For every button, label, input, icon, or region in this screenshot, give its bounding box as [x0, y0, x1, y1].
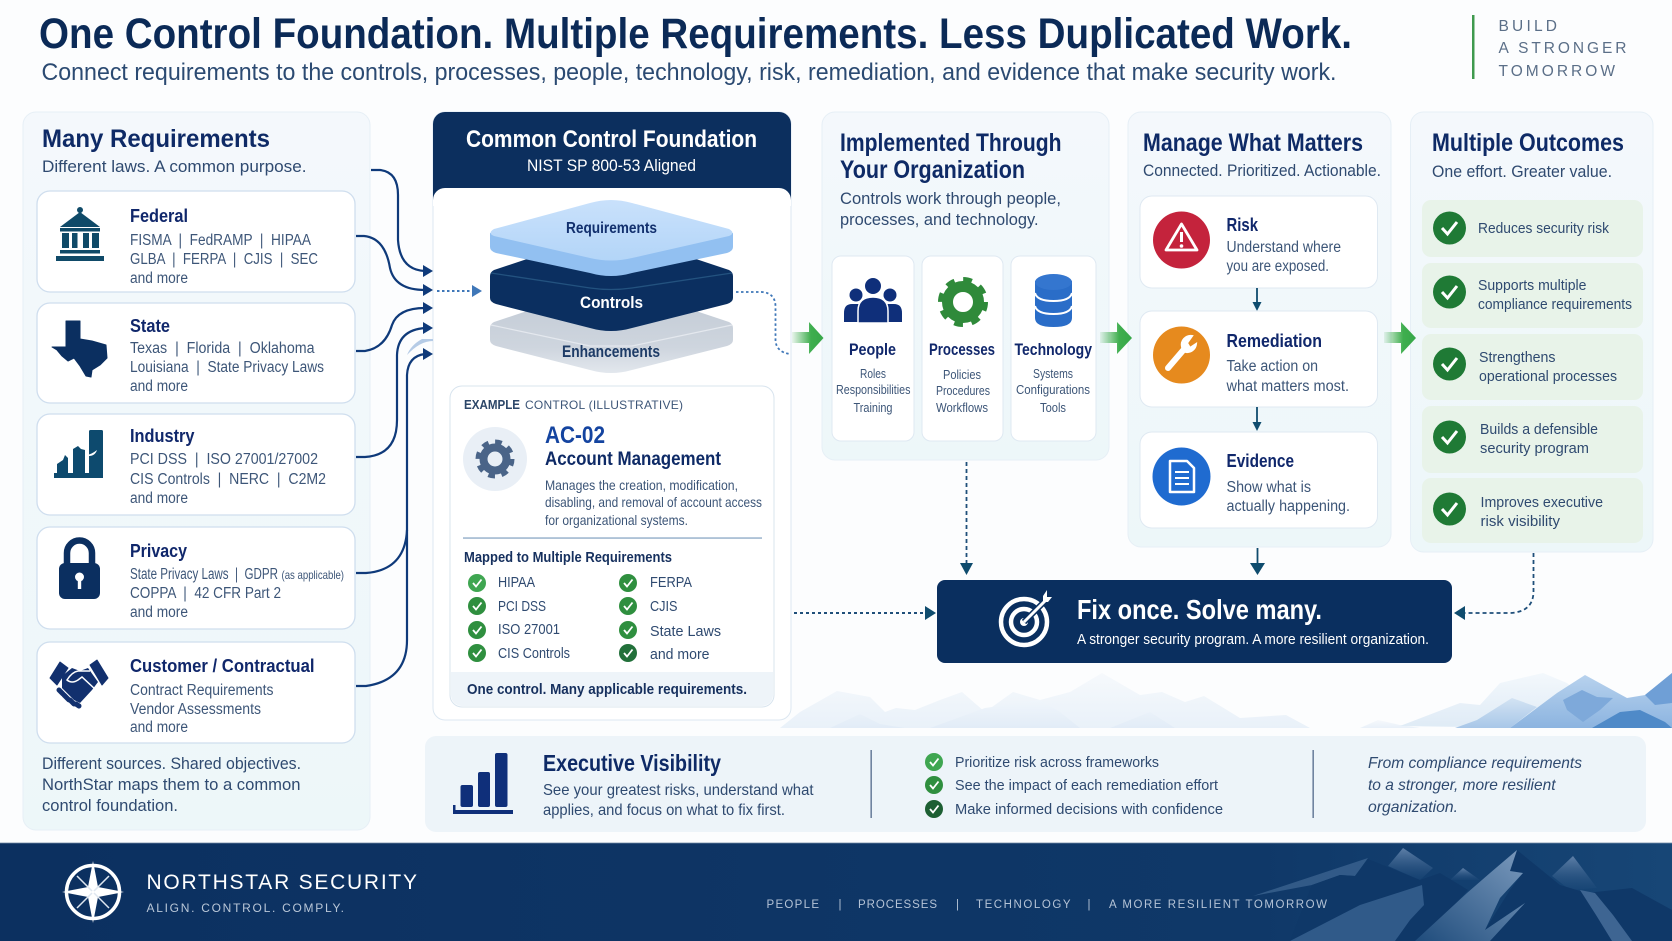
card: federal: GLBA | FERPA | CJIS | SEC — [130, 251, 318, 268]
note: shared objectives: control foundation. — [42, 796, 178, 815]
card: state: Louisiana | State Privacy Laws — [130, 359, 324, 376]
icon: handshake — [50, 660, 108, 706]
card: evidence: actually happening. — [1226, 498, 1350, 515]
arrow: dotted out of stack — [736, 292, 790, 354]
card: industry: and more — [130, 490, 188, 507]
arrow: remediation to evidence — [1252, 407, 1262, 431]
note: shared objectives: Different sources. Shared objectives. — [42, 754, 301, 773]
card: federal: Federal — [130, 206, 188, 226]
card: risk — [1140, 196, 1378, 288]
card: privacy: State Privacy Laws | GDPR — [130, 566, 278, 583]
card: processes: Workflows — [936, 401, 988, 415]
card: federal: FISMA | FedRAMP | HIPAA — [130, 232, 312, 249]
card: people: Responsibilities — [836, 383, 910, 397]
card: processes: Procedures — [936, 384, 990, 398]
closing statement — [1368, 755, 1582, 816]
heading: manage what matters: Manage What Matters — [1143, 129, 1363, 157]
outcome: supports multiple compliance requirements: compliance requirements — [1478, 296, 1632, 313]
card: federal: and more — [130, 270, 188, 287]
tagline: build a stronger tomorrow — [1472, 15, 1626, 80]
checklist: mapped requirements right — [619, 574, 721, 663]
icon: wrench — [1153, 326, 1210, 384]
subheading: outcomes: One effort. Greater value. — [1432, 162, 1612, 181]
header: common control foundation — [433, 112, 791, 206]
heading: implemented through your organization — [840, 129, 1062, 184]
arrow: dashed from implementation to fix once — [960, 462, 973, 575]
tagline: build a stronger tomorrow: A STRONGER — [1498, 40, 1626, 57]
card: state: Texas | Florida | Oklahoma — [130, 340, 315, 357]
stack: controls layer: Controls — [580, 293, 643, 312]
checklist: mapped requirements left: ISO 27001 — [498, 621, 560, 638]
arrows: requirements feed into foundation — [356, 170, 433, 686]
footer band — [0, 842, 1672, 941]
control description: for organizational systems. — [545, 512, 688, 528]
title: One Control Foundation. Multiple Requirements. Less Duplicated Work. — [39, 10, 1352, 58]
outcome: supports multiple compliance requirements: Supports multiple — [1478, 277, 1586, 294]
card: customer / contractual: Vendor Assessments — [130, 701, 261, 718]
card: example control — [450, 386, 774, 707]
card: state: and more — [130, 378, 188, 395]
icon: target — [1001, 590, 1052, 645]
icon: bar chart — [453, 753, 513, 814]
icon: warning — [1153, 212, 1210, 268]
footer strapline: | — [1088, 899, 1090, 911]
icon: database — [1035, 274, 1072, 327]
note: shared objectives: NorthStar maps them to a common — [42, 775, 300, 794]
icon: gear in circle — [463, 427, 527, 491]
card: customer / contractual: and more — [130, 719, 188, 736]
card: remediation — [1140, 311, 1378, 407]
outcome: strengthens operational processes — [1422, 334, 1643, 400]
callout: fix once solve many: Fix once. Solve many. — [1077, 594, 1322, 625]
closing statement: organization. — [1368, 799, 1458, 816]
icon: document — [1152, 448, 1210, 506]
card: technology: Configurations — [1016, 383, 1090, 397]
card: privacy: Privacy — [130, 541, 187, 561]
card: privacy: and more — [130, 604, 188, 621]
control id: AC-02: AC-02 — [545, 422, 605, 449]
arrow: dotted from foundation to fix once — [794, 606, 936, 620]
control name: Account Management — [545, 449, 722, 470]
outcome: builds a defensible security program — [1422, 406, 1643, 473]
card: federal — [37, 191, 355, 292]
checklist: mapped requirements left: HIPAA — [498, 574, 535, 591]
checklist: mapped requirements right: State Laws — [650, 623, 721, 640]
outcome: reduces security risk: Reduces security risk — [1478, 220, 1609, 237]
description: executive visibility: applies, and focus on what to fix first. — [543, 802, 785, 819]
checklist: executive benefits: See the impact of each remediation effort — [955, 777, 1219, 794]
heading: implemented through your organization: Implemented Through — [840, 129, 1062, 157]
card: remediation: what matters most. — [1226, 378, 1349, 395]
card: processes: Processes — [929, 341, 995, 359]
brand tagline: ALIGN. CONTROL. COMPLY. — [146, 901, 344, 915]
brand name: NORTHSTAR SECURITY — [146, 871, 417, 894]
callout: fix once solve many: A stronger security program. A more resilient organization. — [1077, 631, 1429, 648]
tagline: build a stronger tomorrow: BUILD — [1498, 18, 1557, 35]
outcome: reduces security risk — [1422, 200, 1643, 257]
card: risk: Understand where — [1226, 239, 1341, 256]
footer strapline: | — [956, 899, 959, 911]
card: technology: Tools — [1040, 401, 1066, 415]
card: technology: Technology — [1014, 341, 1093, 359]
stack: controls layer — [490, 258, 733, 331]
icon: green gear — [941, 280, 985, 324]
card: remediation: Take action on — [1226, 358, 1318, 375]
outcome: supports multiple compliance requirements — [1422, 263, 1643, 328]
footer strapline: A MORE RESILIENT TOMORROW — [1109, 899, 1327, 911]
subheading: implementation: processes, and technology. — [840, 210, 1038, 229]
checklist: mapped requirements right: FERPA — [650, 574, 692, 591]
tagline: build a stronger tomorrow: TOMORROW — [1498, 63, 1615, 80]
closing statement: to a stronger, more resilient — [1368, 777, 1556, 794]
card: processes: Policies — [943, 368, 981, 382]
checklist: mapped requirements left — [468, 574, 570, 662]
outcome: improves executive risk visibility: Improves executive — [1480, 494, 1603, 511]
checklist: mapped requirements left: CIS Controls — [498, 645, 570, 662]
callout: one control many requirements: One control. Many applicable requirements. — [467, 681, 747, 698]
subheading: manage: Connected. Prioritized. Actionable. — [1143, 161, 1381, 180]
arrow: manage to fix once — [1250, 548, 1265, 575]
card: privacy: COPPA | 42 CFR Part 2 — [130, 585, 281, 602]
panel: common control foundation — [433, 112, 791, 720]
description: executive visibility — [543, 782, 814, 819]
footer strapline: TECHNOLOGY — [976, 899, 1071, 911]
heading: implemented through your organization: Your Organization — [840, 156, 1025, 184]
card: industry: PCI DSS | ISO 27001/27002 — [130, 451, 318, 468]
card: industry: Industry — [130, 426, 194, 446]
checklist: mapped requirements right: and more — [650, 646, 710, 663]
arrow: green to manage — [1100, 322, 1132, 354]
card: evidence — [1140, 432, 1378, 528]
footer strapline: PROCESSES — [858, 899, 937, 911]
card: evidence: Evidence — [1226, 451, 1294, 471]
stack: requirements layer: Requirements — [566, 220, 657, 237]
card: state: State — [130, 316, 170, 336]
card: technology: Systems — [1033, 367, 1073, 381]
control description: disabling, and removal of account access — [545, 494, 762, 510]
card: customer / contractual — [37, 642, 355, 743]
description: executive visibility: See your greatest risks, understand what — [543, 782, 814, 799]
card: customer / contractual: Customer / Contractual — [130, 656, 314, 676]
card: people: Roles — [860, 367, 886, 381]
panel: implemented through your organization — [822, 112, 1109, 460]
outcome: builds a defensible security program: security program — [1480, 440, 1589, 457]
arrow: dotted into stack — [437, 285, 482, 297]
arrow: risk to remediation — [1252, 288, 1262, 311]
checklist: executive benefits: Prioritize risk across frameworks — [955, 754, 1159, 771]
icon: government building — [56, 207, 104, 261]
mountains: light background range — [780, 673, 1420, 728]
stack: enhancements layer: Enhancements — [562, 342, 660, 361]
card: people — [832, 256, 914, 441]
note: shared objectives — [42, 754, 301, 815]
stack: requirements layer — [490, 200, 733, 276]
card: state — [37, 303, 355, 403]
closing statement: From compliance requirements — [1368, 755, 1582, 772]
outcome: builds a defensible security program: Builds a defensible — [1480, 421, 1598, 438]
card: privacy: (as applicable) — [282, 568, 344, 582]
card: risk: you are exposed. — [1226, 258, 1329, 275]
subtitle: Connect requirements to the controls, processes, people, technology, risk, remediation, and evidence that make security work. — [42, 59, 1336, 86]
card: privacy — [37, 527, 355, 629]
card: evidence: Show what is — [1226, 479, 1311, 496]
icon: people — [844, 278, 902, 323]
checklist: mapped requirements right: CJIS — [650, 598, 678, 615]
checklist: executive benefits — [925, 753, 1223, 818]
subheading: implementation: Controls work through people, — [840, 189, 1061, 208]
footer strapline: PEOPLE — [766, 899, 819, 911]
mountains: blue right range — [1400, 673, 1672, 728]
callout: one control many requirements — [451, 672, 773, 706]
logo: northstar compass — [62, 861, 124, 923]
card: processes — [922, 256, 1003, 441]
control description: Manages the creation, modification, — [545, 477, 738, 493]
checklist: executive benefits: Make informed decisions with confidence — [955, 801, 1223, 818]
outcome: improves executive risk visibility: risk visibility — [1480, 513, 1560, 530]
heading: many requirements: Many Requirements — [42, 125, 270, 153]
panel: many requirements — [23, 112, 370, 830]
panel: executive visibility — [425, 736, 1646, 832]
panel: multiple outcomes — [1410, 112, 1653, 552]
icon: industry bars — [54, 430, 103, 478]
icon: texas — [52, 321, 107, 377]
heading: executive visibility: Executive Visibility — [543, 750, 721, 776]
heading: multiple outcomes: Multiple Outcomes — [1432, 129, 1624, 157]
card: technology — [1011, 256, 1096, 441]
card: people: Training — [854, 401, 893, 415]
panel: manage what matters — [1128, 112, 1391, 547]
header: common control foundation: Common Control Foundation — [466, 126, 757, 153]
footer strapline: | — [838, 899, 842, 911]
arrow: dotted from outcomes to fix once — [1454, 553, 1534, 620]
card: risk: Risk — [1226, 215, 1259, 235]
outcome: strengthens operational processes: operational processes — [1479, 368, 1617, 385]
card: remediation: Remediation — [1226, 331, 1322, 351]
stack: enhancements layer — [490, 310, 733, 373]
control description — [545, 477, 762, 528]
label: example control: EXAMPLE — [464, 398, 520, 412]
outcome: improves executive risk visibility — [1422, 478, 1643, 543]
arrow: green to implementation — [792, 322, 824, 354]
footer mountains — [1253, 848, 1672, 941]
card: customer / contractual: Contract Requirements — [130, 682, 274, 699]
subheading: many requirements: Different laws. A common purpose. — [42, 157, 306, 176]
label: example control: CONTROL (ILLUSTRATIVE) — [525, 398, 683, 412]
arrow: green to outcomes — [1384, 322, 1416, 354]
card: people: People — [849, 341, 896, 359]
subheading: implementation — [840, 189, 1061, 229]
mapped requirements heading: Mapped to Multiple Requirements — [464, 550, 672, 566]
checklist: mapped requirements left: PCI DSS — [498, 598, 546, 615]
card: industry: CIS Controls | NERC | C2M2 — [130, 471, 326, 488]
outcome: strengthens operational processes: Strengthens — [1479, 349, 1556, 366]
footer strapline — [766, 899, 1327, 911]
card: industry — [37, 414, 355, 515]
header: common control foundation: NIST SP 800-53 Aligned — [527, 156, 696, 175]
icon: lock — [59, 540, 100, 599]
callout: fix once solve many — [937, 580, 1452, 663]
